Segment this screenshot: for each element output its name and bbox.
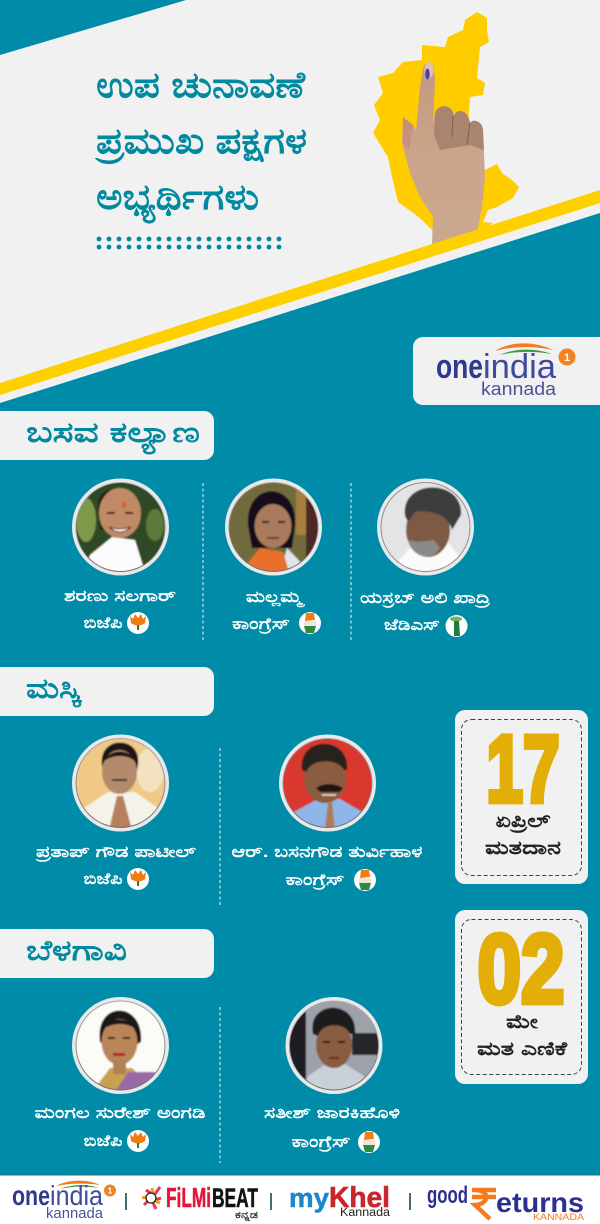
- party name: BJP: ಬಿಜೆಪಿ: [84, 615, 123, 632]
- footer logo: oneindia: [12, 1180, 116, 1222]
- party name: Congress: ಕಾಂಗ್ರೆಸ್: [286, 872, 345, 891]
- logo: oneindia kannada: kannada: [481, 379, 557, 399]
- heading: Maski: ಮಸ್ಕಿ: [26, 673, 83, 708]
- candidate photo: Mangala Suresh Angadi: [70, 997, 170, 1098]
- icon: Congress hand: [358, 1131, 380, 1153]
- footer logo: Filmibeat: [142, 1182, 259, 1222]
- header light panel: [0, 0, 600, 403]
- title: ಪ್ರಮುಖ ಪಕ್ಷಗಳ: [94, 120, 307, 164]
- stripes: [0, 190, 600, 395]
- map of Karnataka: [373, 12, 519, 238]
- divider lines: [203, 483, 351, 1163]
- candidate photo: Yasrab Ali Khadri: [375, 478, 475, 580]
- date card: 17 April polling: ಏಪ್ರಿಲ್: [496, 811, 551, 833]
- footer logo: goodreturns: eturns: [496, 1187, 584, 1218]
- title: ಉಪ ಚುನಾವಣೆ: [96, 64, 306, 105]
- logo: oneindia kannada: [413, 337, 600, 405]
- candidate name: Pratapgouda Patil: ಪ್ರತಾಪ್ ಗೌಡ ಪಾಟೀಲ್: [33, 844, 197, 863]
- candidate name: Sharanu Salagar: ಶರಣು ಸಲಗಾರ್: [64, 588, 176, 605]
- logo: oneindia kannada: one: [436, 348, 483, 386]
- icon: BJP lotus: [127, 868, 149, 890]
- date card: 17 April polling: [455, 710, 588, 884]
- icon: inked finger hand: [402, 62, 485, 245]
- icon: Congress hand: [354, 869, 376, 891]
- date card: 17 April polling: ಮತದಾನ: [485, 838, 562, 859]
- footer logo: oneindia: one: [12, 1180, 50, 1211]
- logo: oneindia kannada: 1: [564, 352, 570, 364]
- candidate photo: Pratapgouda Patil: [70, 734, 170, 835]
- heading: Basavakalyan: ಬಸವ ಕಲ್ಯಾಣ: [26, 417, 200, 455]
- date card: 02 May counting: ಮತ ಎಣಿಕೆ: [477, 1039, 569, 1060]
- party name: Congress: ಕಾಂಗ್ರೆಸ್: [232, 616, 290, 635]
- candidate photo: Sharanu Salagar: [70, 478, 170, 580]
- title: ಅಭ್ಯರ್ಥಿಗಳು: [96, 176, 259, 224]
- party name: Congress: ಕಾಂಗ್ರೆಸ್: [292, 1134, 351, 1153]
- date card: 02 May counting: ಮೇ: [506, 1012, 539, 1033]
- footer logo: goodreturns: [427, 1182, 585, 1223]
- candidate name: Mangala Suresh Angadi: ಮಂಗಲ ಸುರೇಶ್ ಅಂಗಡಿ: [34, 1105, 206, 1122]
- date card: 02 May counting: [455, 910, 588, 1084]
- footer logo: myKhel: [289, 1182, 391, 1219]
- candidate name: Satish Jarkiholi: ಸತೀಶ್ ಜಾರಕಿಹೊಳಿ: [264, 1105, 401, 1122]
- heading: Maski: [0, 667, 214, 716]
- heading: Belagavi: [0, 929, 214, 978]
- party name: BJP: ಬಿಜೆಪಿ: [84, 871, 123, 888]
- icon: Congress hand: [299, 612, 321, 634]
- candidate photo: Satish Jarkiholi: [285, 997, 385, 1098]
- footer logo: Filmibeat: BEAT: [212, 1183, 258, 1213]
- date card: 17 April polling: 17: [486, 717, 560, 822]
- footer logo: oneindia: india: [50, 1180, 103, 1211]
- heading: Belagavi: ಬೆಳಗಾವಿ: [26, 935, 127, 966]
- footer logo: Filmibeat: FiLMi: [166, 1182, 211, 1213]
- logo: oneindia kannada: india: [483, 348, 556, 386]
- footer bar: [0, 1173, 600, 1224]
- heading: Basavakalyan: [0, 411, 214, 460]
- footer logo: goodreturns: good: [427, 1182, 468, 1209]
- footer logo: myKhel: Khel: [329, 1182, 390, 1214]
- title: [94, 64, 307, 224]
- footer separators: [126, 1193, 410, 1210]
- footer logo: myKhel: my: [289, 1183, 329, 1213]
- candidate name: Yasrab Ali Khadri: ಯಸ್ರಬ್ ಅಲಿ ಖಾದ್ರಿ: [360, 590, 491, 609]
- footer logo: oneindia: 1: [108, 1186, 113, 1196]
- icon: JDS farmer woman: [446, 615, 468, 637]
- party name: BJP: ಬಿಜೆಪಿ: [84, 1133, 123, 1150]
- icon: BJP lotus: [127, 1130, 149, 1152]
- party name: JDS: ಜೆಡಿಎಸ್: [384, 617, 440, 634]
- candidate name: R. Basanagouda Turvihal: ಆರ್. ಬಸನಗೌಡ ತುರ್ವಿಹಾಳ: [232, 844, 423, 861]
- footer logo: myKhel: Kannada: [340, 1207, 391, 1219]
- footer logo: oneindia: kannada: [46, 1206, 104, 1222]
- candidate photo: Mallamma: [225, 478, 325, 580]
- dotted rule: [97, 237, 281, 249]
- footer logo: goodreturns: KANNADA: [533, 1212, 585, 1223]
- candidate name: Mallamma: ಮಲ್ಲಮ್ಮ: [246, 589, 305, 609]
- icon: BJP lotus: [127, 612, 149, 634]
- date card: 02 May counting: 02: [478, 914, 564, 1023]
- footer logo: Filmibeat: ಕನ್ನಡ: [235, 1210, 259, 1222]
- candidate photo: R. Basanagouda Turvihal: [278, 734, 378, 835]
